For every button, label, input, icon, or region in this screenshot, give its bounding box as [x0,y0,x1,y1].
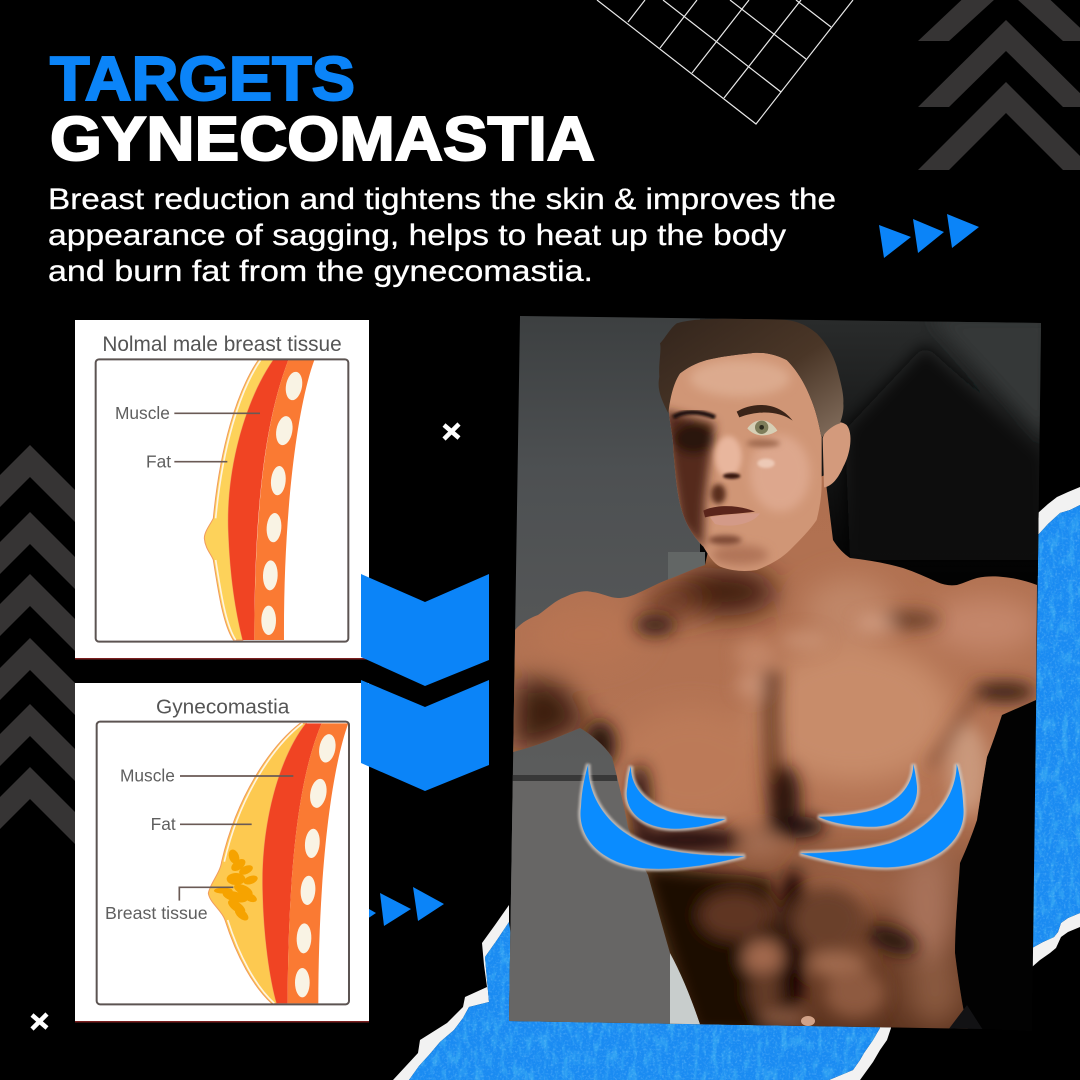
photo: shirtless man [505,310,1050,1040]
label: panel heading: Nolmal male breast tissue [102,332,342,356]
title line: GYNECOMASTIA: GYNECOMASTIA [50,105,595,174]
diagram: gynecomastia tissue layers [208,723,348,1003]
label: breast tissue: Breast tissue [105,903,208,923]
diagram frame [96,359,348,642]
title [50,45,595,174]
figure: hair [659,318,843,438]
arrows: top right triangles [879,214,979,258]
figure: navel [801,1016,815,1026]
blue paper texture [390,500,1080,1080]
figure: face shading [663,360,810,565]
torn paper: blue textured background [390,487,1080,1080]
label: panel heading: Gynecomastia [156,696,290,718]
curve: left inner [627,766,726,829]
curve: right outer [800,764,964,867]
glow behind curves [580,764,964,869]
arrows: blue down chevrons [361,574,489,791]
label: fat: Fat [146,451,171,471]
figure: eye and brow [737,405,793,435]
muscle definition shadows [584,611,1035,1035]
figure: torso and arms [505,470,1045,1040]
label: muscle: Muscle [115,403,170,423]
diagram frame [97,722,349,1004]
label: muscle: Muscle [120,766,175,786]
torn edge: white ribbons [393,487,1080,1080]
broad muscle tones [513,568,1040,1025]
label: fat: Fat [151,814,176,834]
chevrons top right [918,0,1080,170]
figure: ear [823,422,850,487]
callout: target area curves [580,764,964,869]
diagram: normal tissue layers [204,360,314,640]
chevrons left [0,445,75,844]
description text: and burn fat from the gynecomastia. [48,255,593,288]
icon: x mark middle [444,424,459,439]
figure: face [668,353,822,571]
label: breast tissue [105,887,233,923]
description text [48,183,836,288]
figure: mouth [703,506,760,526]
photo background [505,310,1050,1040]
label: fat [151,814,252,834]
figure: waistband [949,1006,982,1029]
title line: TARGETS: TARGETS [50,45,355,114]
description text: appearance of sagging, helps to heat up the body [48,219,786,252]
panel: gynecomastia [75,683,369,1022]
grid pattern top right [597,0,853,124]
blue paper fill [409,505,1080,1080]
curve: right inner [818,764,917,827]
panel: normal male breast tissue [75,320,369,660]
curve: left outer [580,764,745,869]
description text: Breast reduction and tightens the skin & improves the [48,183,836,216]
figure: head [659,318,850,571]
label: fat [146,451,227,471]
icon: x mark bottom left [32,1014,47,1029]
arrows: lower triangles [362,887,444,926]
